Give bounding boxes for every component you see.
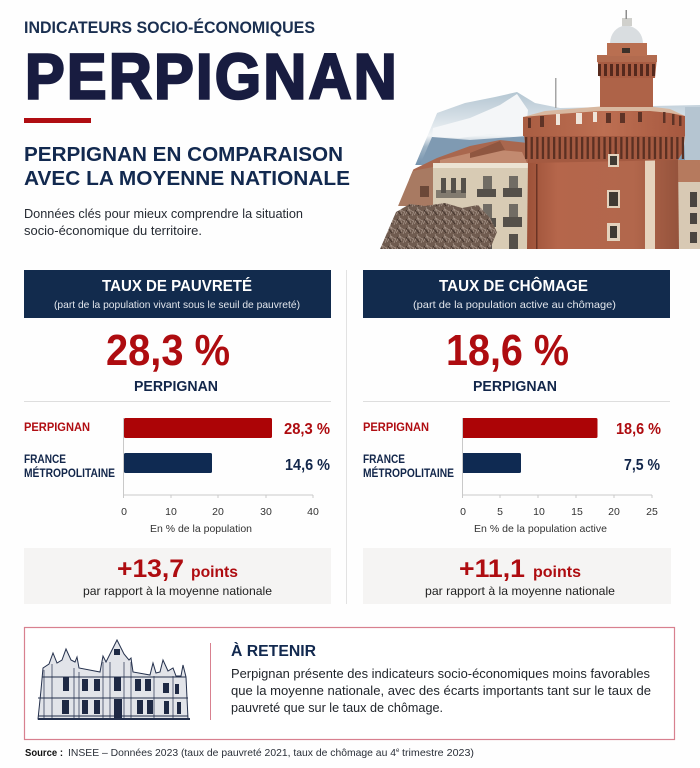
bar chart: [24, 418, 330, 535]
callout: écart: par rapport à la moyenne nationale: [83, 584, 272, 598]
callout: écart: +13,7: [117, 555, 184, 583]
intro text: [24, 207, 303, 238]
subtitle: AVEC LA MOYENNE NATIONALE: [24, 168, 350, 190]
dome: [610, 25, 643, 43]
left roofs: [408, 140, 530, 180]
bar chart: MÉTROPOLITAINE: [363, 467, 454, 480]
mountains: [415, 92, 700, 165]
bar chart: 10: [165, 506, 177, 518]
far-left building: [398, 167, 433, 206]
cream building: [433, 163, 528, 249]
panel header: [24, 270, 331, 318]
text block: pauvreté que sur le taux de chômage.: [231, 701, 443, 715]
heading: kicker: INDICATEURS SOCIO-ÉCONOMIQUES: [24, 18, 315, 37]
bar chart: 20: [212, 506, 224, 518]
bar chart: 0: [460, 506, 466, 518]
panel header: [363, 270, 670, 318]
right building and mountain: [685, 107, 700, 160]
illustration: Castillet tower and town: [380, 10, 700, 249]
text block: [231, 667, 651, 715]
bar chart: MÉTROPOLITAINE: [24, 467, 115, 480]
subtitle: PERPIGNAN EN COMPARAISON: [24, 144, 343, 166]
key figure: 28,3 %: [106, 326, 230, 375]
panel: taux de chômage: [363, 270, 671, 604]
bar chart: FRANCE: [363, 454, 405, 466]
bar chart: 18,6 %: [616, 421, 661, 438]
upper turret: [600, 78, 653, 107]
crenel band: [523, 111, 685, 136]
key figure: PERPIGNAN: [134, 379, 218, 395]
tower body: [527, 160, 679, 249]
panel header: TAUX DE CHÔMAGE: [439, 277, 588, 295]
red accent bar: [24, 118, 91, 123]
bar chart: [363, 418, 661, 535]
panel header: (part de la population vivant sous le seuil de pauvreté): [54, 299, 300, 311]
bar chart: 0: [121, 506, 127, 518]
icon: town hall sketch: [38, 640, 190, 719]
key figure: [106, 326, 230, 395]
bar chart: En % de la population: [150, 523, 252, 535]
panel header: TAUX DE PAUVRETÉ: [102, 278, 252, 295]
panel header: (part de la population active au chômage): [413, 299, 616, 311]
bar chart: 20: [608, 506, 620, 518]
bar chart: 30: [260, 506, 272, 518]
callout: écart: +11,1: [459, 555, 525, 583]
bar chart: 5: [497, 506, 503, 518]
machicolations: [524, 135, 685, 163]
bar chart: FRANCE: [24, 454, 66, 466]
bar chart: 10: [533, 506, 545, 518]
trees: [380, 203, 497, 249]
text block: que la moyenne nationale, avec des écarts importants tant sur le taux de: [231, 684, 651, 698]
key figure: 18,6 %: [446, 326, 569, 375]
source: Source :: [25, 747, 63, 759]
source: INSEE – Données 2023 (taux de pauvreté 2021, taux de chômage au 4: [68, 747, 396, 759]
source: trimestre 2023): [402, 747, 474, 759]
bar chart: 15: [571, 506, 583, 518]
bar chart: 40: [307, 506, 319, 518]
subtitle: [24, 144, 350, 190]
bar chart: PERPIGNAN: [363, 422, 429, 434]
bar chart: 14,6 %: [285, 457, 330, 474]
panel: taux de pauvreté: [24, 270, 331, 604]
intro text: socio-économique du territoire.: [24, 224, 202, 238]
title: PERPIGNAN: [25, 40, 399, 112]
source: e: [396, 748, 400, 754]
callout: écart: points: [533, 564, 581, 581]
intro text: Données clés pour mieux comprendre la situation: [24, 207, 303, 221]
windows: [607, 154, 620, 241]
callout: écart: [24, 548, 331, 604]
panel: à retenir: [24, 628, 674, 740]
callout: écart: points: [191, 564, 238, 581]
bar chart: 28,3 %: [284, 421, 330, 438]
key figure: PERPIGNAN: [473, 379, 557, 395]
text block: Perpignan présente des indicateurs socio-économiques moins favorables: [231, 667, 650, 681]
bar chart: 25: [646, 506, 658, 518]
pole: [555, 78, 556, 108]
callout: écart: [363, 548, 671, 604]
callout: écart: par rapport à la moyenne nationale: [425, 584, 615, 598]
heading: À RETENIR: [231, 641, 316, 660]
bar chart: En % de la population active: [474, 523, 607, 535]
key figure: [446, 326, 569, 395]
bar chart: 7,5 %: [624, 457, 660, 474]
bar chart: PERPIGNAN: [24, 422, 90, 434]
